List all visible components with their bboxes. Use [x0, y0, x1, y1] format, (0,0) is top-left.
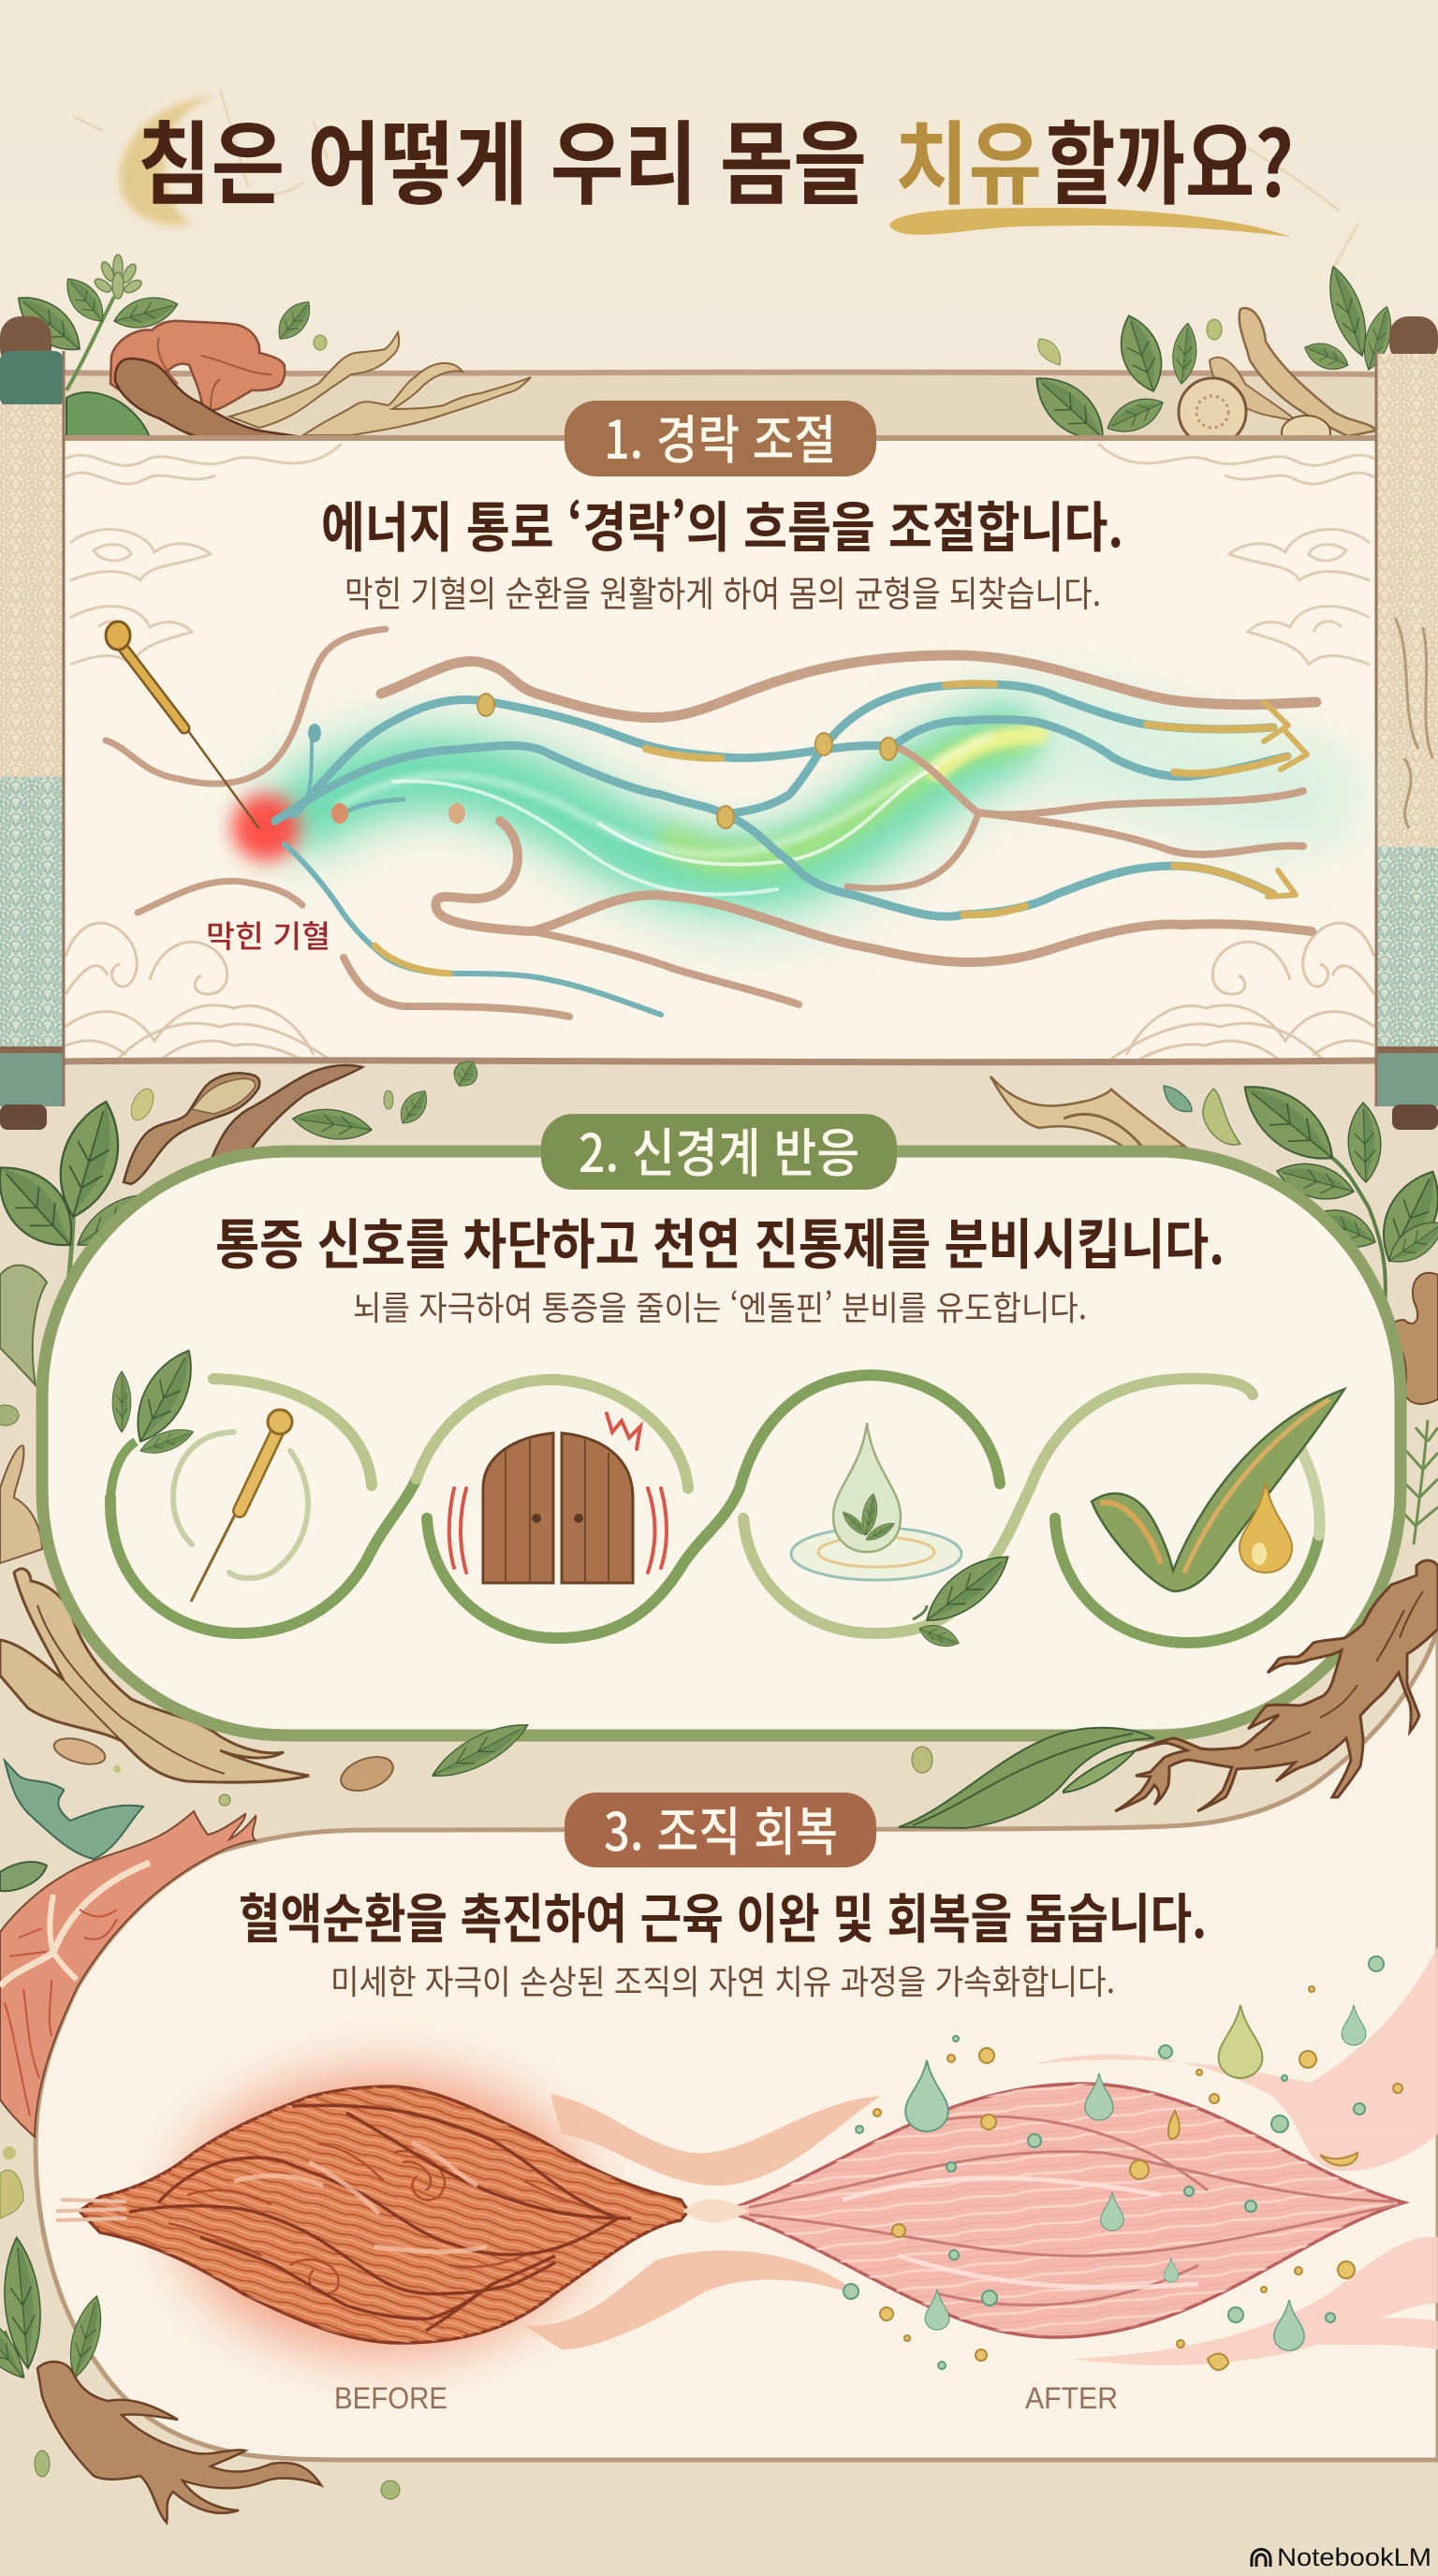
muscle belly: [80, 2086, 688, 2343]
herbs: top right cluster: [1023, 262, 1398, 453]
title gold brush underline: [889, 208, 1290, 237]
green droplets: [905, 2005, 1366, 2350]
heading: section 2: 통증 신호를 차단하고 천연 진통제를 분비시킵니다.: [215, 1201, 1225, 1280]
peach wisps: [523, 2094, 881, 2349]
heading: section 3: 혈액순환을 촉진하여 근육 이완 및 회복을 돕습니다.: [239, 1877, 1207, 1954]
small leaf: [0, 1862, 47, 1891]
gold meridian segments: [374, 683, 1287, 973]
green beads: [844, 1956, 1384, 2369]
meridian point dots: [308, 694, 897, 828]
icon: acupuncture needle: [106, 622, 258, 827]
pink flowing wisps: [1034, 1946, 1438, 2365]
arrowheads: [1264, 702, 1307, 897]
label: BEFORE: BEFORE: [334, 2381, 448, 2415]
muscle illustration top-left: [0, 1811, 256, 2137]
icon: leaf check mark and oil drop: [1092, 1389, 1344, 1591]
tendon bridge: [683, 2199, 749, 2223]
heading: section 1: 에너지 통로 ‘경락’의 흐름을 조절합니다.: [321, 484, 1123, 563]
panel 1: meridian scroll body: [64, 437, 1376, 1062]
herbs: left big root: [0, 1569, 932, 1891]
tendon ends: [56, 2200, 721, 2220]
icon: needle with ripple and sprout: [110, 1341, 308, 1602]
red inflammation glow: [178, 2073, 590, 2354]
subheading: section 2: 뇌를 자극하여 통증을 줄이는 ‘엔돌핀’ 분비를 유도합니다.: [353, 1281, 1087, 1330]
label: 막힌 기혈: 막힌 기혈: [206, 912, 330, 957]
right scroll roller: [1376, 316, 1438, 1130]
title text: gold emphasis: 치유: [895, 91, 1042, 223]
subheading: section 1: 막힌 기혈의 순환을 원활하게 하여 몸의 균형을 되찾습니다.: [345, 565, 1101, 617]
scroll cloud ornaments: [66, 444, 1374, 1061]
title: [119, 91, 1294, 237]
herbs: right ginseng: [1115, 1560, 1438, 1811]
badge: 3. 조직 회복: 3. 조직 회복: [604, 1791, 838, 1866]
green energy glow: [309, 735, 1301, 895]
muscle fibres: [740, 2084, 1401, 2336]
NotebookLM mark: NotebookLM: [1277, 2543, 1431, 2571]
panel 3: tissue recovery panel: [36, 1629, 1438, 2460]
brown meridians: [106, 629, 1316, 1017]
meridian flow chart: [106, 629, 1316, 1017]
teal torn leaf: [5, 1761, 143, 1859]
panel 2: nervous system capsule: [42, 1151, 1401, 1735]
process wave line: [110, 1375, 1320, 1643]
before: inflamed muscle: [56, 2073, 881, 2354]
red blocked point glow: [232, 794, 300, 861]
herbs: long leaf: [426, 1713, 1154, 1828]
title text: dark part: 침은 어떻게 우리 몸을: [138, 91, 867, 223]
icon: closing wooden gate: [449, 1413, 667, 1583]
muscle fibres: [75, 2078, 702, 2349]
herbs: right side between panels: [990, 1069, 1438, 1544]
badge: 1. 경락 조절: 1. 경락 조절: [604, 399, 836, 475]
after: relaxed muscle: [683, 1946, 1438, 2370]
left scroll roller: [0, 316, 64, 1130]
subheading: section 3: 미세한 자극이 손상된 조직의 자연 치유 과정을 가속화합니다.: [330, 1955, 1115, 2004]
icon: endorphin droplet with ripple: [791, 1423, 1019, 1652]
label: AFTER: AFTER: [1025, 2381, 1118, 2415]
herbs: left side between panels: [0, 1056, 483, 1563]
teal meridians: [275, 684, 1287, 1015]
title text: ending: 할까요?: [1046, 91, 1294, 223]
muscle belly: [725, 2084, 1404, 2337]
gold beads: [873, 1986, 1402, 2370]
panel 1: scroll header band: [56, 373, 1386, 440]
title gold brush crescent: [119, 96, 217, 226]
herbs: bottom left ginseng: [0, 2146, 400, 2523]
herbs: top left cluster: [7, 255, 531, 440]
badge: 2. 신경계 반응: 2. 신경계 반응: [579, 1112, 859, 1188]
